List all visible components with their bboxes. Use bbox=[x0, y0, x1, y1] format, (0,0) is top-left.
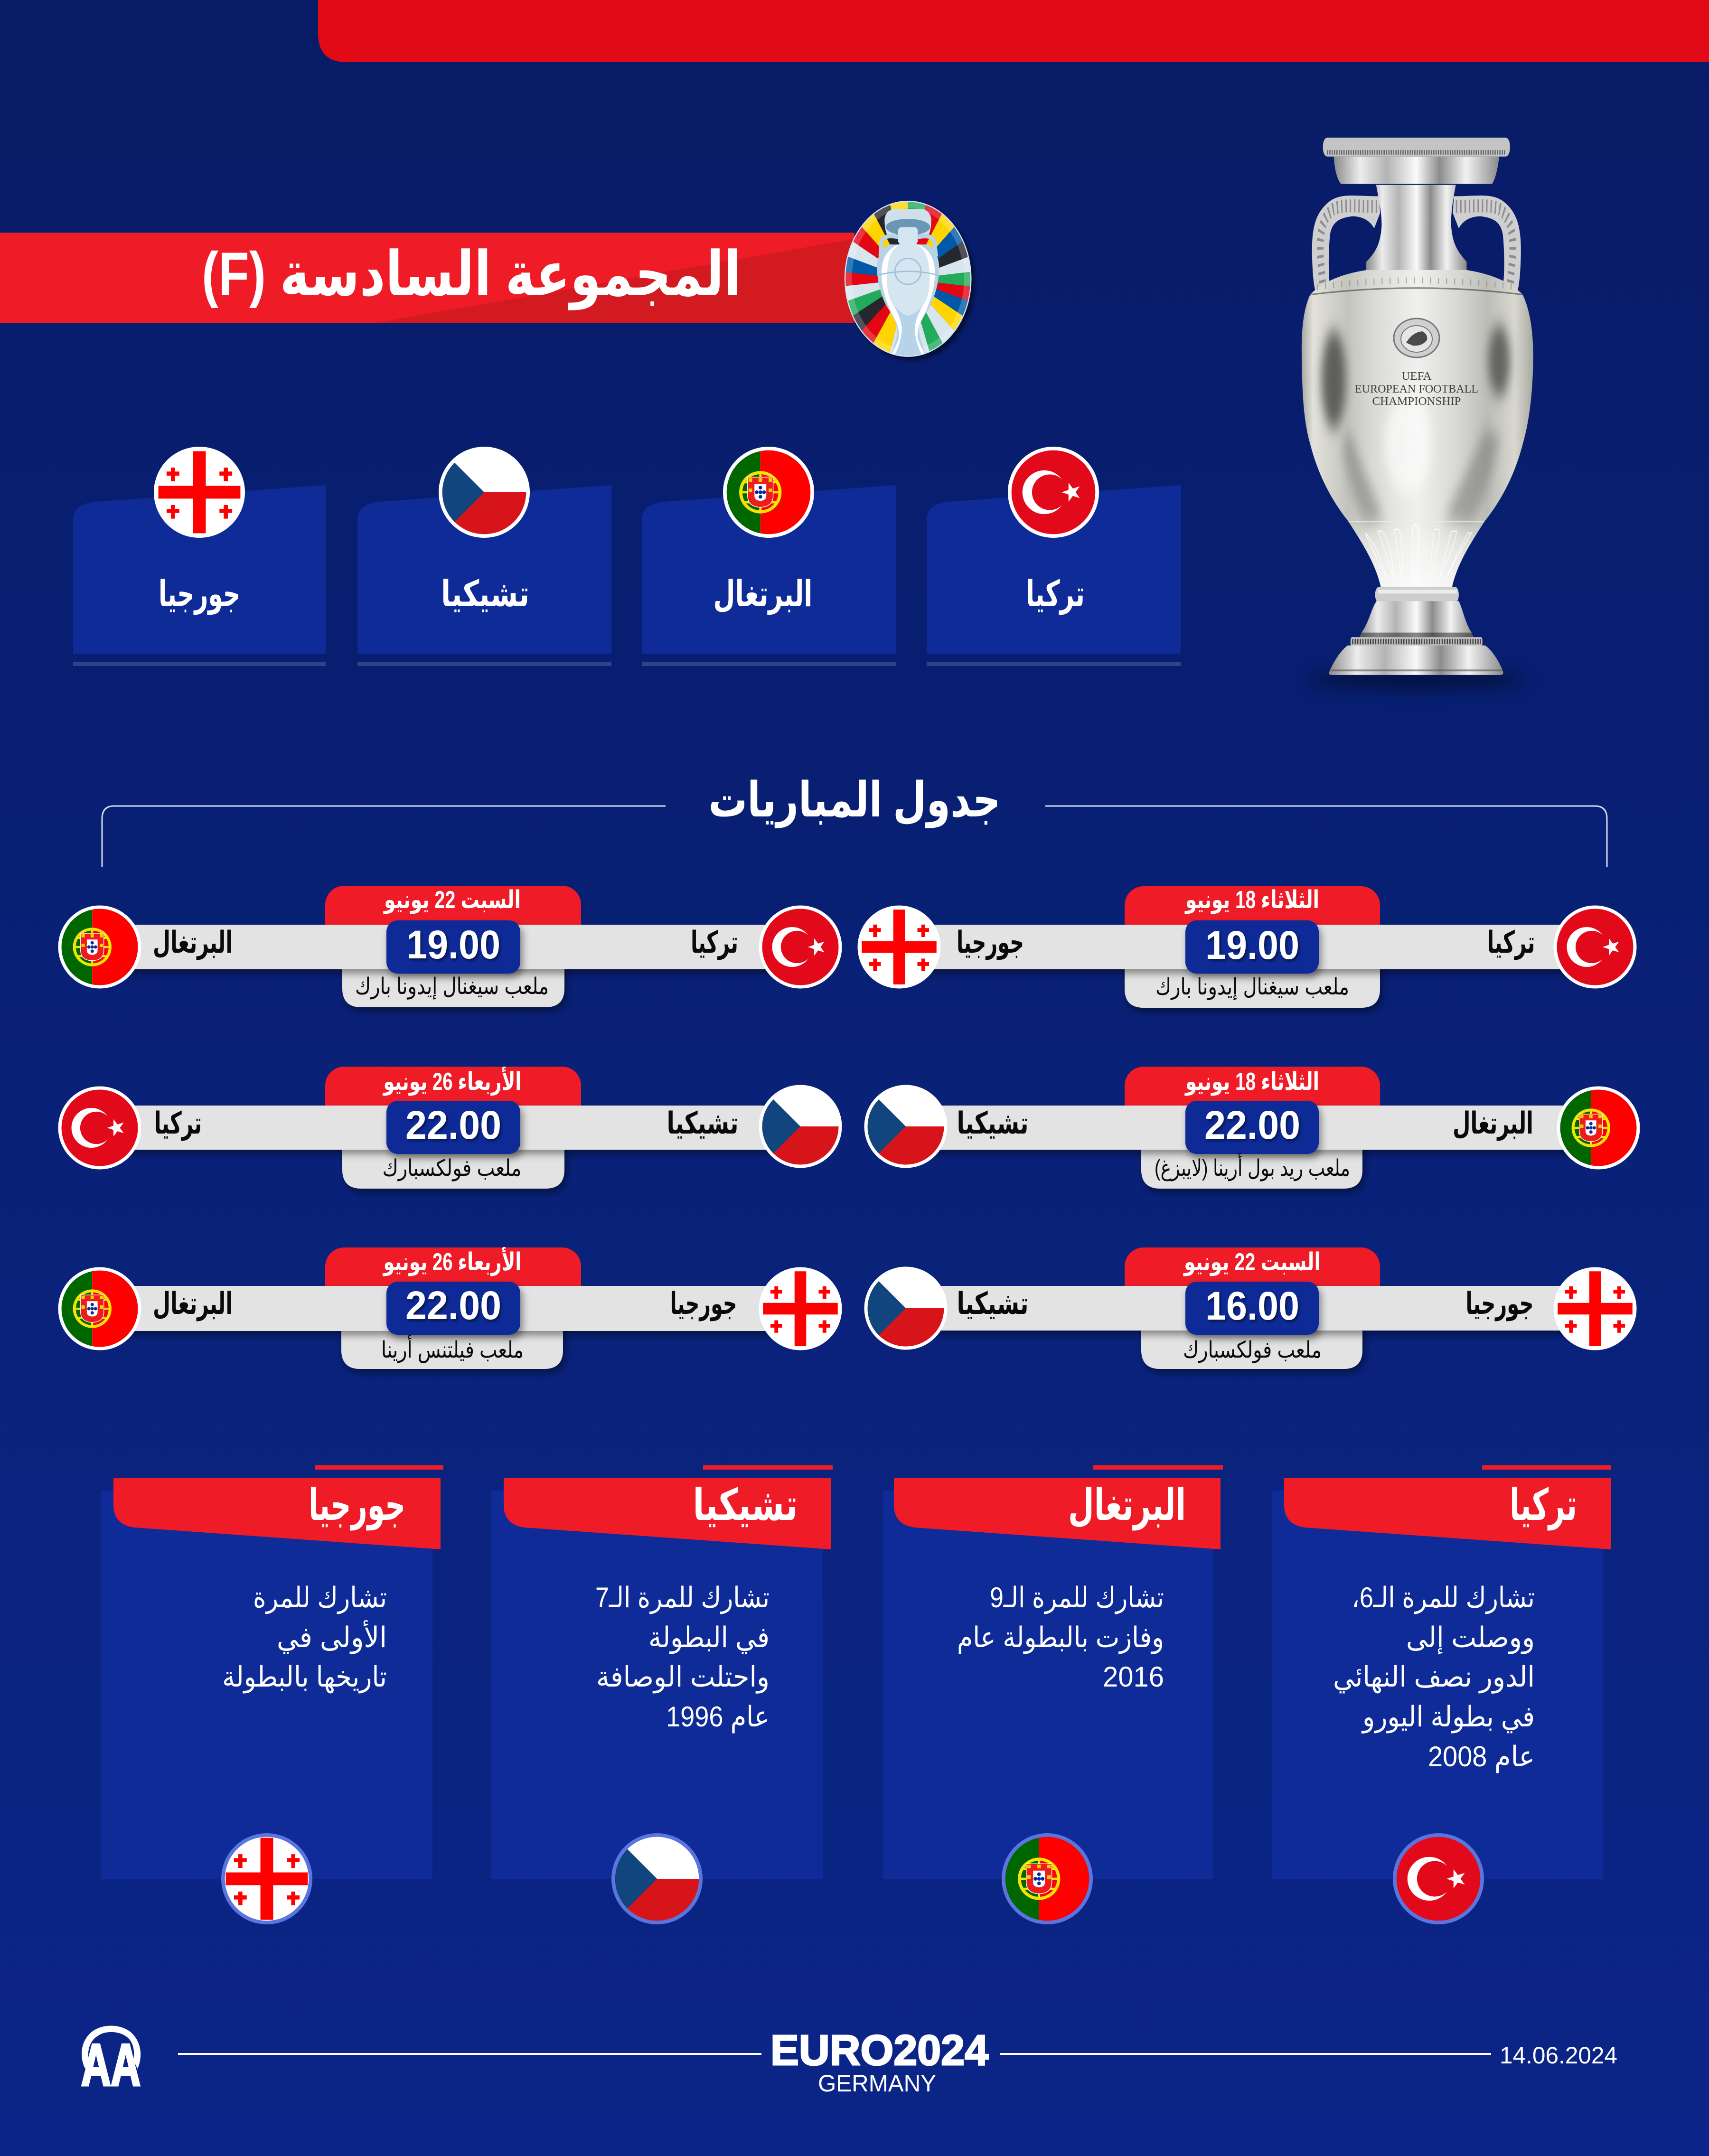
panel: team card Portugal: البرتغال bbox=[713, 574, 813, 615]
panel: team card Czechia bbox=[357, 447, 611, 666]
match: Georgia vs Portugal: ملعب فيلتنس أرينا bbox=[381, 1335, 524, 1363]
match: Georgia vs Czechia: السبت 22 يونيو bbox=[1183, 1248, 1321, 1276]
panel: Portugal info bbox=[883, 1465, 1223, 1924]
match: Turkey vs Portugal: السبت 22 يونيو bbox=[383, 886, 521, 914]
trophy engraving: UEFA bbox=[1401, 370, 1432, 383]
panel: Czechia info: عام 1996 bbox=[666, 1701, 770, 1733]
match: Turkey vs Georgia: جورجيا bbox=[957, 925, 1024, 960]
match: Georgia vs Portugal: جورجيا bbox=[670, 1286, 737, 1322]
panel: Georgia info: تاريخها بالبطولة bbox=[222, 1661, 387, 1694]
match: Czechia vs Turkey: الأربعاء 26 يونيو bbox=[382, 1066, 521, 1096]
match: Portugal vs Czechia: تشيكيا bbox=[957, 1106, 1028, 1140]
panel: Georgia info: جورجيا bbox=[309, 1481, 405, 1531]
section heading: match schedule: جدول المباريات bbox=[708, 773, 1001, 828]
match: Georgia vs Portugal: البرتغال bbox=[153, 1286, 233, 1322]
match: Czechia vs Turkey: تشيكيا bbox=[667, 1106, 739, 1140]
panel: Czechia info: تشيكيا bbox=[693, 1481, 798, 1529]
panel: team card Georgia bbox=[73, 447, 326, 666]
trophy collar and foot bbox=[1329, 587, 1503, 675]
match: Turkey vs Portugal: 19.00 bbox=[406, 922, 500, 967]
match: Georgia vs Czechia: 16.00 bbox=[1205, 1284, 1299, 1328]
icon: AA logo: AA bbox=[81, 2033, 141, 2098]
match: Georgia vs Portugal: الأربعاء 26 يونيو bbox=[382, 1247, 521, 1276]
panel: Turkey info: الدور نصف النهائي bbox=[1333, 1661, 1535, 1694]
trophy emblem bbox=[1394, 319, 1439, 357]
match: Portugal vs Czechia bbox=[864, 1067, 1640, 1189]
panel: Georgia info: الأولى في bbox=[277, 1620, 387, 1654]
match: Czechia vs Turkey bbox=[58, 1066, 842, 1189]
match: Turkey vs Portugal: البرتغال bbox=[153, 925, 233, 960]
match: Georgia vs Portugal: 22.00 bbox=[405, 1283, 501, 1328]
match: Georgia vs Czechia: تشيكيا bbox=[957, 1286, 1028, 1321]
match: Turkey vs Portugal: ملعب سيغنال إيدونا بارك bbox=[355, 974, 549, 1000]
match: Georgia vs Czechia: جورجيا bbox=[1466, 1286, 1533, 1322]
panel: Portugal info: 2016 bbox=[1103, 1661, 1164, 1693]
panel: team card Georgia: جورجيا bbox=[159, 574, 240, 615]
match: Portugal vs Czechia: 22.00 bbox=[1204, 1103, 1300, 1147]
panel: Turkey info: تركيا bbox=[1510, 1481, 1577, 1531]
icon: AA logo bbox=[81, 2025, 141, 2098]
match: Turkey vs Portugal bbox=[58, 886, 842, 1007]
trophy engraving: CHAMPIONSHIP bbox=[1372, 395, 1461, 408]
trophy engraving bbox=[1355, 370, 1478, 408]
match: Georgia vs Czechia bbox=[864, 1247, 1637, 1369]
panel: Czechia info: في البطولة bbox=[648, 1622, 770, 1654]
panel: Turkey info: ووصلت إلى bbox=[1406, 1622, 1535, 1654]
panel: Georgia info: تشارك للمرة bbox=[253, 1582, 387, 1614]
match: Georgia vs Portugal bbox=[58, 1247, 842, 1369]
match: Turkey vs Georgia: الثلاثاء 18 يونيو bbox=[1184, 886, 1319, 914]
trophy neck bbox=[1366, 185, 1466, 272]
top red banner bbox=[318, 0, 1709, 62]
match: Georgia vs Czechia: ملعب فولكسبارك bbox=[1183, 1338, 1322, 1363]
panel: Turkey info: تشارك للمرة الـ6، bbox=[1352, 1582, 1535, 1614]
panel: Czechia info bbox=[491, 1465, 833, 1924]
match: Turkey vs Portugal: تركيا bbox=[691, 925, 738, 960]
trophy right handle bbox=[1453, 196, 1521, 297]
panel: team card Turkey bbox=[927, 447, 1181, 666]
Germany wordmark: GERMANY bbox=[818, 2070, 936, 2097]
panel: Turkey info bbox=[1272, 1465, 1611, 1924]
panel: Czechia info: واحتلت الوصافة bbox=[596, 1661, 770, 1694]
Euro 2024 wordmark: EURO2024 bbox=[770, 2027, 988, 2074]
panel: Turkey info: في بطولة اليورو bbox=[1361, 1701, 1535, 1734]
panel: Portugal info: تشارك للمرة الـ9 bbox=[990, 1582, 1164, 1614]
trophy body bbox=[1302, 270, 1533, 588]
trophy left handle bbox=[1312, 196, 1380, 297]
match: Czechia vs Turkey: ملعب فولكسبارك bbox=[383, 1156, 521, 1181]
trophy cup rim bbox=[1334, 157, 1499, 184]
panel: Czechia info: تشارك للمرة الـ7 bbox=[595, 1582, 770, 1614]
date: 14.06.2024 bbox=[1500, 2042, 1617, 2069]
trophy engraving: EUROPEAN FOOTBALL bbox=[1355, 383, 1478, 395]
match: Portugal vs Czechia: الثلاثاء 18 يونيو bbox=[1184, 1068, 1319, 1096]
footer bbox=[81, 2025, 1617, 2098]
group title banner bbox=[0, 233, 854, 323]
panel: team card Portugal bbox=[642, 447, 896, 666]
panel: team card Czechia: تشيكيا bbox=[441, 574, 529, 614]
match: Turkey vs Georgia: ملعب سيغنال إيدونا بارك bbox=[1155, 975, 1349, 1000]
match: Portugal vs Czechia: البرتغال bbox=[1453, 1106, 1533, 1141]
match: Czechia vs Turkey: تركيا bbox=[154, 1106, 202, 1141]
panel: Georgia info bbox=[101, 1465, 443, 1924]
match: Turkey vs Georgia: تركيا bbox=[1487, 925, 1535, 960]
panel: Portugal info: وفازت بالبطولة عام bbox=[957, 1622, 1164, 1654]
match: Portugal vs Czechia: ملعب ريد بول أرينا (لايبزغ) bbox=[1155, 1153, 1350, 1181]
match: Turkey vs Georgia bbox=[857, 886, 1637, 1008]
match: Czechia vs Turkey: 22.00 bbox=[405, 1103, 501, 1147]
icon: Euro 2024 logo bbox=[844, 200, 977, 362]
trophy bbox=[1302, 138, 1533, 689]
title: المجموعة السادسة (F) bbox=[202, 239, 741, 310]
section heading: match schedule bbox=[102, 773, 1607, 867]
panel: Turkey info: عام 2008 bbox=[1428, 1741, 1535, 1773]
panel: team card Turkey: تركيا bbox=[1026, 574, 1085, 615]
match: Turkey vs Georgia: 19.00 bbox=[1205, 923, 1299, 967]
panel: Portugal info: البرتغال bbox=[1068, 1481, 1186, 1531]
